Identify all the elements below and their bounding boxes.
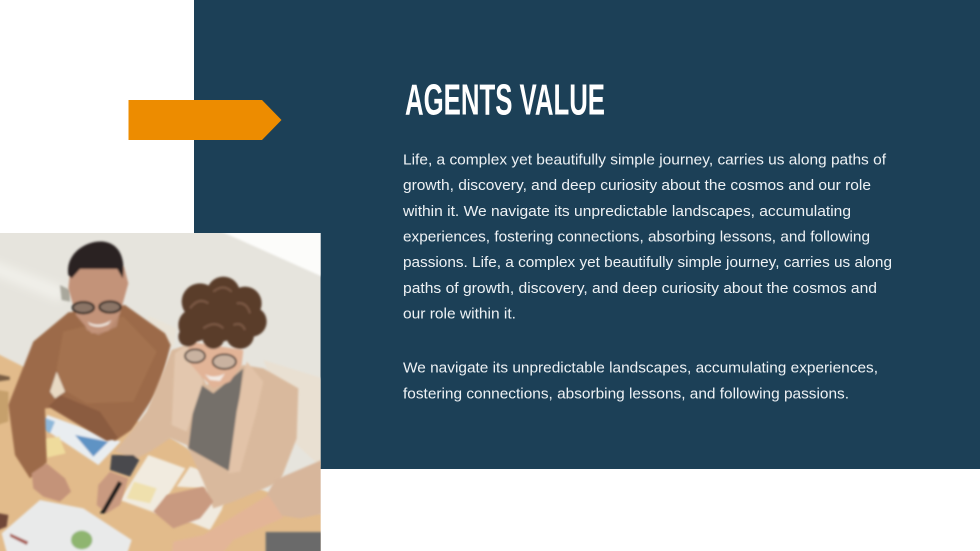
text block: second paragraph: [403, 360, 878, 402]
photo: colleagues working at a table: [0, 225, 339, 551]
text block: second paragraph: fostering connections, absorbing lessons, and following passions.: [403, 386, 849, 402]
panel: navy background: [194, 0, 980, 469]
photo table: [0, 348, 333, 551]
text block: first paragraph: Life, a complex yet beautifully simple journey, carries us along paths of: [403, 152, 887, 168]
text block: first paragraph: our role within it.: [403, 306, 516, 322]
arrow: orange pointer: [128, 100, 282, 140]
photo foreground arm and laptop: [0, 455, 339, 551]
text block: first paragraph: passions. Life, a complex yet beautifully simple journey, carries us along: [403, 254, 892, 271]
photo wall: [0, 233, 321, 492]
photo woman: [97, 277, 298, 528]
text block: second paragraph: We navigate its unpredictable landscapes, accumulating experiences,: [403, 360, 878, 376]
text block: first paragraph: [402, 152, 892, 322]
text block: first paragraph: experiences, fostering connections, absorbing lessons, and following: [403, 228, 870, 246]
text block: first paragraph: within it. We navigate its unpredictable landscapes, accumulating: [402, 203, 851, 220]
photo papers and notes: [2, 415, 230, 551]
text block: first paragraph: paths of growth, discovery, and deep curiosity about the cosmos and: [403, 280, 877, 297]
heading: AGENTS VALUE: [405, 76, 605, 124]
text block: first paragraph: growth, discovery, and deep curiosity about the cosmos and our role: [403, 177, 871, 194]
photo man: [8, 242, 171, 502]
